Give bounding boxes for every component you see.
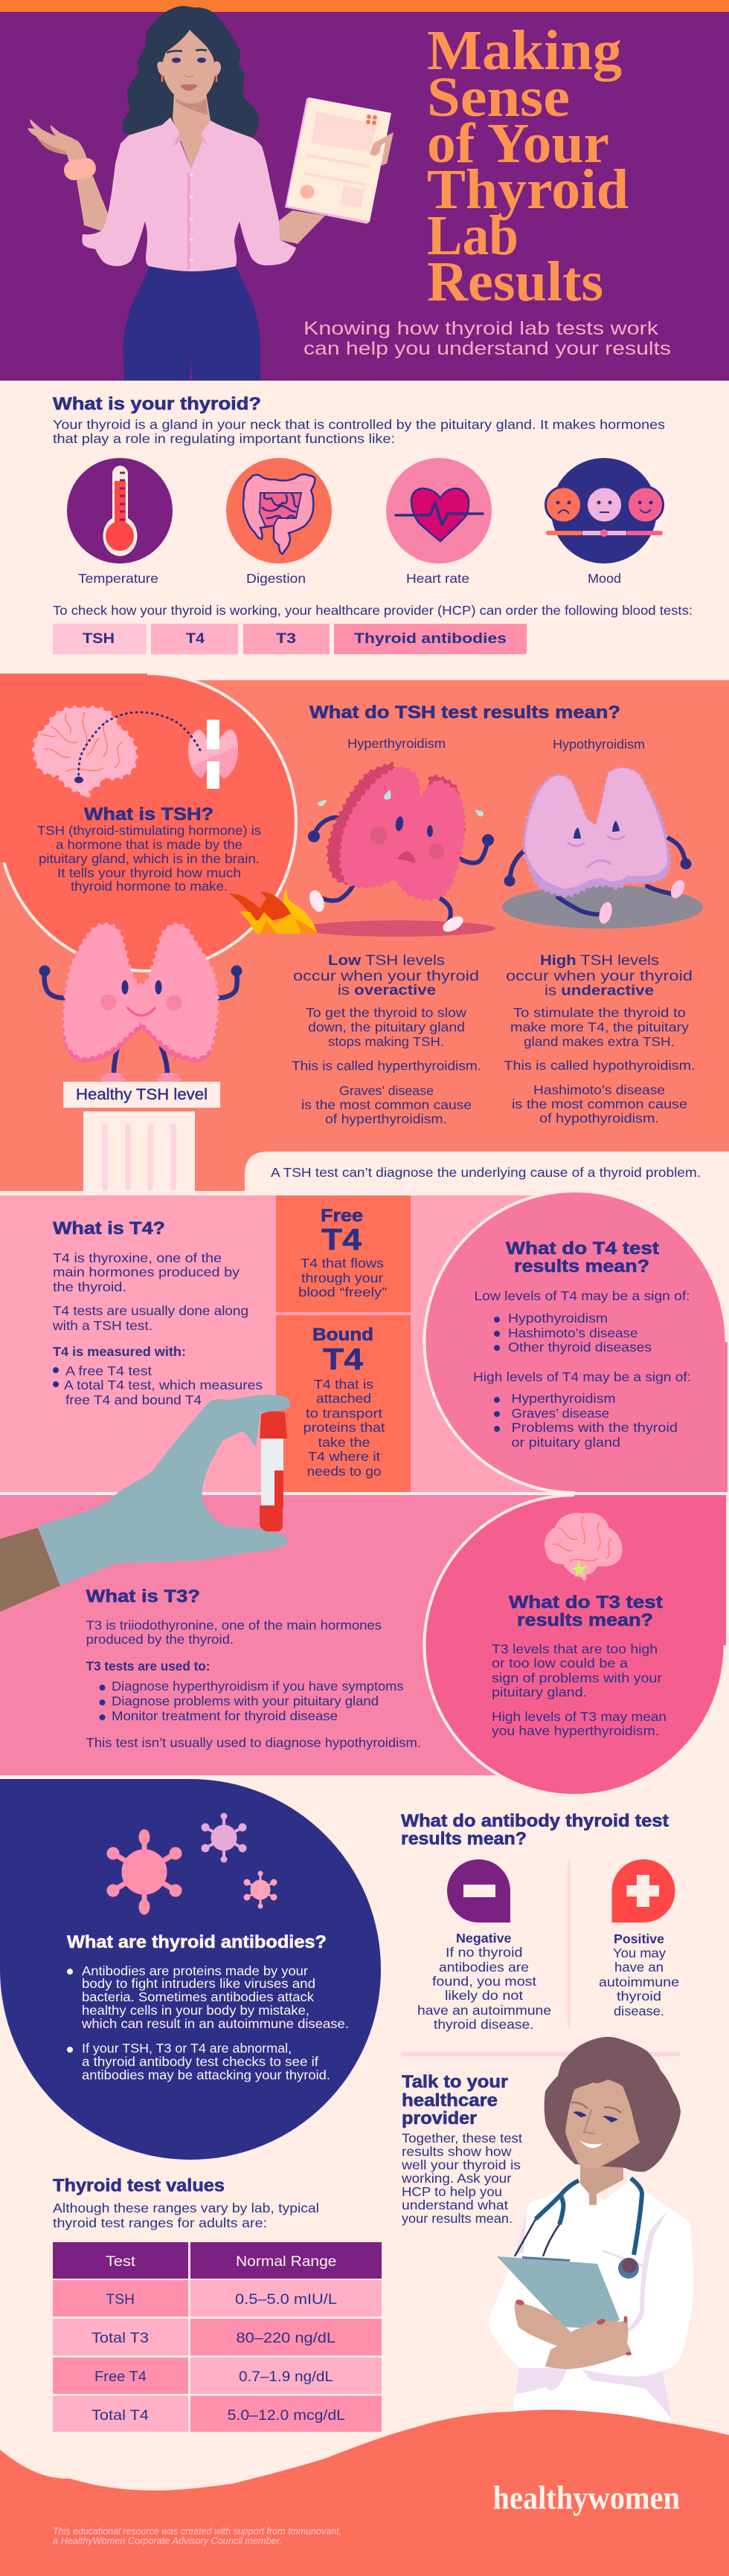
table: Free T4 [94,2369,147,2385]
positive text: autoimmune [599,1975,679,1989]
column: high TSH: occur when your thyroid [506,968,693,984]
header banner [0,0,729,381]
blood tests intro: To check how your thyroid is working, your healthcare provider (HCP) can order the following blood tests: [53,603,693,618]
negative text: have an autoimmune [417,2003,551,2018]
box: bound T4: needs to go [306,1464,381,1479]
panel: T3 results shape: T3 levels that are too high [492,1642,658,1656]
icon: brain with pituitary star [545,1513,623,1581]
box: free T4: T4 that flows [301,1256,384,1271]
icon labels: Mood [588,571,621,586]
column: low TSH: occur when your thyroid [293,968,479,984]
TSH description: a hormone that is made by the [56,837,243,852]
talk to your healthcare provider: results show how [402,2144,512,2159]
icon: digestion [226,458,332,564]
table: 80–220 ng/dL [237,2331,335,2346]
callout [245,1152,729,1191]
panel: T3 results shape: What do T3 test [509,1592,663,1613]
panel: what is your thyroid [53,394,693,654]
labels: hyper and hypo: Hyperthyroidism [347,736,446,751]
box: free T4: blood “freely” [298,1285,387,1300]
positive text: You may [613,1946,666,1960]
subtitle: Knowing how thyroid lab tests work [304,318,659,339]
heading: what is TSH: What is TSH? [84,804,213,824]
icon: healthy thyroid on pedestal [39,924,243,1191]
column: high TSH: Hashimoto’s disease [533,1082,665,1097]
icon: medium virus cell [202,1813,246,1862]
box: free T4: T4 [321,1222,362,1256]
panel: T4 results shape: Hypothyroidism [508,1311,608,1326]
box: bound T4: proteins that [304,1420,385,1435]
negative text [417,1931,551,2032]
divider above talk section [401,2052,680,2056]
disclaimer: a HealthyWomen Corporate Advisory Council member. [53,2535,282,2546]
TSH description [37,823,261,894]
panel: T4 results shape: Hyperthyroidism [512,1391,616,1406]
title: Lab [427,204,518,267]
negative text: thyroid disease. [434,2017,534,2032]
divider between T4 and T3 [0,1492,729,1495]
test chips: T4 [186,631,205,647]
title: of Your [427,112,609,175]
column: high TSH: This is called hypothyroidism. [504,1058,695,1073]
icon: temperature [67,458,173,564]
negative text: found, you most [432,1974,536,1989]
test chips: Thyroid antibodies [354,631,507,647]
column: high TSH [504,952,695,1126]
illustration: gloved hand with blood tube [0,1395,290,1612]
icon: brain [34,708,136,797]
heading [401,1811,669,1849]
antibody bullet list: body to fight intruders like viruses and [82,1976,315,1991]
icon labels: Digestion [246,571,306,586]
table: 0.7–1.9 ng/dL [239,2369,333,2385]
T4 text: main hormones produced by [53,1265,240,1279]
panel: TSH [0,674,729,1191]
T3 text: This test isn’t usually used to diagnose hypothyroidism. [86,1735,421,1750]
table: Test [106,2254,136,2270]
T3 text: What is T3? [86,1586,200,1607]
panel: T3 results shape: sign of problems with your [492,1670,662,1685]
antibody bullet list: bacteria. Sometimes antibodies attack [82,1989,314,2004]
talk to your healthcare provider: understand what [402,2198,508,2212]
T4 text: What is T4? [53,1218,165,1239]
column: low TSH: This is called hyperthyroidism. [292,1059,481,1074]
subtitle: can help you understand your results [304,338,671,359]
panel: thyroid test values: Although these ranges vary by lab, typical [53,2201,319,2215]
title: Making [427,19,622,82]
test chips [53,624,527,654]
T4 text: free T4 and bound T4 [65,1392,202,1407]
icon labels [78,571,621,586]
T3 text: Diagnose hyperthyroidism if you have symptoms [112,1679,404,1694]
table: Total T3 [91,2331,149,2346]
column: low TSH: Graves’ disease [339,1083,434,1098]
test chips: TSH [83,631,115,647]
illustration: doctor [489,2037,693,2424]
panel: T4 results shape: results mean? [514,1256,649,1276]
column: low TSH: is overactive [338,982,436,998]
intro text: that play a role in regulating important functions like: [53,431,395,446]
negative text: Negative [456,1931,512,1946]
talk to your healthcare provider [401,2072,522,2226]
table [53,2242,382,2432]
heading: TSH results: What do TSH test results mean? [309,703,620,723]
panel: thyroid antibodies [0,1779,381,2160]
talk to your healthcare provider: Talk to your [402,2072,508,2092]
box: bound T4: T4 where it [308,1449,380,1464]
icon: small virus cell [244,1871,277,1908]
panel: thyroid test values [53,2175,382,2432]
antibody bullet list: Antibodies are proteins made by your [82,1963,308,1978]
column: low TSH: of hyperthyroidism. [325,1111,447,1126]
T3 text: Diagnose problems with your pituitary gland [112,1694,379,1708]
talk to your healthcare provider: Together, these test [402,2131,522,2146]
vertical divider [568,1861,571,2028]
icon labels: Heart rate [406,571,469,586]
box: bound T4: take the [318,1435,370,1450]
title: Thyroid [427,158,629,221]
icon: flames and ground shadow [229,887,495,937]
box: bound T4: Bound [312,1325,373,1345]
footer wave [0,2409,729,2576]
T4 text: T4 is thyroxine, one of the [53,1250,222,1265]
icon labels: Temperature [78,571,158,586]
talk to your healthcare provider: healthcare [402,2091,498,2111]
panel: T4 results shape: What do T4 test [506,1239,659,1259]
logo: healthywomen [492,2480,680,2516]
icon: large virus cell [107,1830,182,1914]
icon: overactive thyroid character [306,764,494,934]
antibody bullet list: If your TSH, T3 or T4 are abnormal, [82,2041,292,2056]
panel: T4 results shape: High levels of T4 may be a sign of: [473,1369,691,1384]
box: bound T4 [276,1315,411,1492]
positive text [599,1931,679,2018]
icon: heart rate [386,458,492,564]
T4 text: A free T4 test [65,1363,152,1378]
column: high TSH: gland makes extra TSH. [524,1034,675,1049]
positive text: Positive [614,1931,664,1946]
column: high TSH: To stimulate the thyroid to [513,1005,686,1020]
T3 text: Monitor treatment for thyroid disease [112,1708,338,1723]
illustration: woman holding lab report [28,6,394,381]
intro text [53,417,665,446]
T4 text [52,1218,263,1407]
test chips: T3 [276,631,296,647]
table: Normal Range [236,2254,336,2270]
panel: T4 results shape: or pituitary gland [512,1435,620,1450]
icon: thyroid with windpipe [188,720,238,789]
panel: T4 results shape: Problems with the thyroid [512,1420,678,1435]
T3 text: T3 tests are used to: [86,1659,210,1673]
heading: What is your thyroid? [53,394,261,414]
labels: hyper and hypo: Hypothyroidism [553,737,645,752]
column: low TSH: down, the pituitary gland [308,1020,465,1035]
column: high TSH: is the most common cause [512,1097,687,1111]
table: TSH [106,2292,135,2308]
panel: T4 results shape: Other thyroid diseases [508,1340,652,1355]
negative text: If no thyroid [446,1945,522,1960]
panel: T3 results shape [424,1495,726,1795]
panel: T4 results shape: Graves’ disease [512,1406,609,1421]
heading: results mean? [401,1829,527,1849]
title [427,19,629,313]
column: low TSH [292,952,481,1126]
title: Sense [427,66,570,129]
label: healthy TSH level: Healthy TSH level [76,1086,208,1103]
box: bound T4: T4 that is [314,1377,373,1392]
column: low TSH: stops making TSH. [328,1034,444,1049]
box: bound T4: attached [316,1391,371,1406]
disclaimer [53,2525,341,2546]
intro text: Your thyroid is a gland in your neck that is controlled by the pituitary gland. It makes hormones [53,417,665,432]
talk to your healthcare provider: well your thyroid is [401,2157,521,2172]
antibody bullet list: a thyroid antibody test checks to see if [82,2054,318,2069]
panel: what is TSH circle [0,674,296,971]
heading: what are thyroid antibodies: What are thyroid antibodies? [67,1932,327,1952]
heading: What do antibody thyroid test [401,1811,669,1831]
column: high TSH: make more T4, the pituitary [510,1020,689,1035]
talk to your healthcare provider: working. Ask your [401,2171,512,2186]
labels: hyper and hypo [347,736,645,752]
column: low TSH: is the most common cause [301,1097,472,1112]
T4 text: T4 is measured with: [53,1344,186,1359]
box: free T4: through your [301,1271,383,1285]
icon: mood [546,458,664,564]
T4 text: T4 tests are usually done along [53,1303,248,1318]
T3 text [86,1586,421,1750]
panel: T4 [0,1191,728,1493]
panel: T3 results shape: pituitary gland. [492,1685,587,1699]
T4 text: with a TSH test. [52,1318,152,1333]
panel: T3 results shape: or too low could be a [492,1656,628,1670]
icon: positive [611,1859,675,1923]
panel: thyroid test values: Thyroid test values [53,2175,225,2196]
positive text: thyroid [617,1989,661,2004]
icon: underactive thyroid character [502,768,703,929]
box: bound T4: T4 [323,1342,363,1376]
antibody bullet list: which can result in an autoimmune disease. [81,2016,349,2031]
column: high TSH: High TSH levels [540,952,659,969]
antibody bullet list [67,1963,349,2082]
T4 text: the thyroid. [53,1279,126,1294]
panel: T4 results shape [424,1191,728,1493]
TSH description: thyroid hormone to make. [71,879,228,894]
callout: A TSH test can’t diagnose the underlying cause of a thyroid problem. [271,1165,701,1180]
negative text: antibodies are [439,1960,529,1975]
T3 text: T3 is triiodothyronine, one of the main hormones [86,1618,382,1633]
icon: negative [447,1859,510,1923]
box: free T4 [276,1195,411,1312]
column: high TSH: is underactive [545,983,654,999]
column: low TSH: Low TSH levels [328,952,445,969]
title: Results [427,251,603,313]
negative text: likely do not [445,1988,523,2003]
label: healthy TSH level [63,1082,220,1108]
panel: T4 results shape: Low levels of T4 may be a sign of: [475,1288,690,1303]
box: free T4: Free [321,1206,363,1226]
antibody bullet list: antibodies may be attacking your thyroid. [82,2067,330,2082]
table: Total T4 [91,2408,149,2424]
T3 text: produced by the thyroid. [86,1632,234,1647]
talk to your healthcare provider: HCP to help you [402,2184,502,2199]
panel: T3 [0,1495,726,1795]
disclaimer: This educational resource was created with support from Immunovant, [53,2525,341,2537]
panel: thyroid test values: thyroid test ranges for adults are: [53,2215,267,2230]
panel: T3 results shape: results mean? [517,1610,653,1630]
panel: antibody results [401,1811,679,2032]
table: 0.5–5.0 mIU/L [235,2292,337,2308]
column: low TSH: To get the thyroid to slow [306,1005,466,1020]
talk to your healthcare provider: your results mean. [402,2211,513,2226]
column: high TSH: of hypothyroidism. [539,1111,659,1126]
panel: T3 results shape: you have hyperthyroidism. [492,1723,659,1738]
antibody bullet list: healthy cells in your body by mistake, [82,2003,309,2018]
talk to your healthcare provider: provider [402,2108,477,2128]
positive text: disease. [614,2004,664,2018]
positive text: have an [614,1960,664,1975]
subtitle [304,318,671,359]
box: bound T4: to transport [306,1406,382,1421]
TSH description: pituitary gland, which is in the brain. [39,851,260,866]
T4 text: A total T4 test, which measures [64,1378,263,1392]
arrow: brain to thyroid [74,712,201,784]
TSH description: It tells your thyroid how much [57,865,241,880]
panel: T3 results shape: High levels of T3 may mean [492,1709,667,1724]
panel: T4 results shape: Hashimoto’s disease [508,1326,638,1340]
table: 5.0–12.0 mcg/dL [228,2408,345,2424]
TSH description: TSH (thyroid-stimulating hormone) is [37,823,261,838]
